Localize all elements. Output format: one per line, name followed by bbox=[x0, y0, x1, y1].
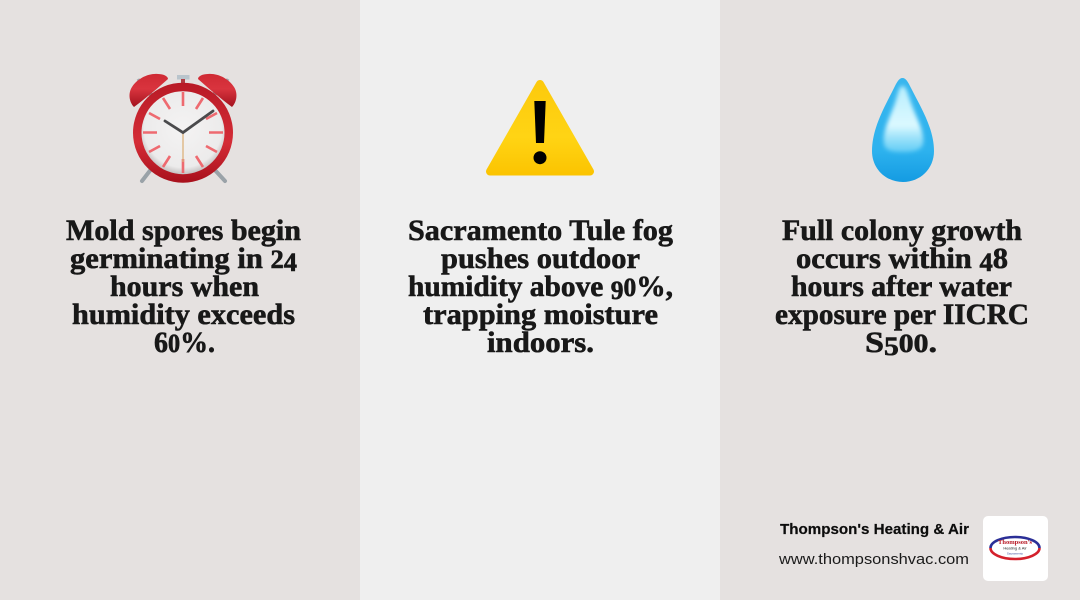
panel: mold germination bbox=[0, 0, 360, 600]
heading: mold spores text: 60%. bbox=[154, 326, 215, 359]
logo: Heating & Air bbox=[1003, 546, 1027, 550]
panel: colony growth bbox=[720, 0, 1080, 600]
heading: colony growth text: Full colony growth bbox=[782, 214, 1022, 247]
heading: tule fog text: indoors. bbox=[487, 326, 594, 359]
heading: mold spores text: 4 bbox=[284, 248, 297, 277]
panel: tule fog bbox=[360, 0, 720, 600]
logo bbox=[983, 516, 1048, 581]
heading: mold spores text: germinating in 2 bbox=[70, 242, 283, 275]
heading: tule fog text: %, bbox=[636, 270, 674, 303]
heading: colony growth text: 00 bbox=[899, 329, 928, 358]
heading: tule fog text: trapping moisture bbox=[423, 298, 658, 331]
heading: colony growth text: hours after water bbox=[791, 270, 1012, 303]
heading: colony growth text: occurs within bbox=[796, 242, 968, 275]
heading: tule fog text: pushes outdoor bbox=[441, 242, 640, 275]
footer: company brand bbox=[778, 516, 1048, 581]
heading: colony growth text: 5 bbox=[884, 332, 899, 361]
icon: water drop bbox=[872, 78, 934, 182]
logo: Thompson's bbox=[998, 539, 1032, 546]
heading: mold spores text: hours when bbox=[110, 270, 259, 303]
heading: tule fog text bbox=[408, 214, 673, 359]
heading: tule fog text: Sacramento Tule fog bbox=[408, 214, 673, 247]
heading: colony growth text: S bbox=[865, 326, 882, 359]
heading: colony growth text: 4 bbox=[979, 248, 993, 277]
heading: mold spores text: humidity exceeds bbox=[72, 298, 295, 331]
website: www.thompsonshvac.com bbox=[778, 551, 969, 568]
heading: colony growth text bbox=[775, 214, 1029, 361]
company name: Thompson's Heating & Air bbox=[780, 521, 969, 538]
logo: Sacramento bbox=[1007, 552, 1023, 556]
heading: tule fog text: 0 bbox=[623, 273, 636, 302]
icon: alarm clock bbox=[130, 74, 236, 183]
icon: warning triangle bbox=[490, 84, 590, 172]
heading: colony growth text: . bbox=[928, 326, 936, 359]
heading: mold spores text bbox=[66, 214, 301, 359]
heading: mold spores text: Mold spores begin bbox=[66, 214, 301, 247]
heading: tule fog text: humidity above bbox=[408, 270, 607, 303]
heading: colony growth text: 8 bbox=[993, 242, 1008, 275]
heading: tule fog text: 9 bbox=[611, 276, 623, 305]
heading: colony growth text: exposure per IICRC bbox=[775, 298, 1029, 331]
